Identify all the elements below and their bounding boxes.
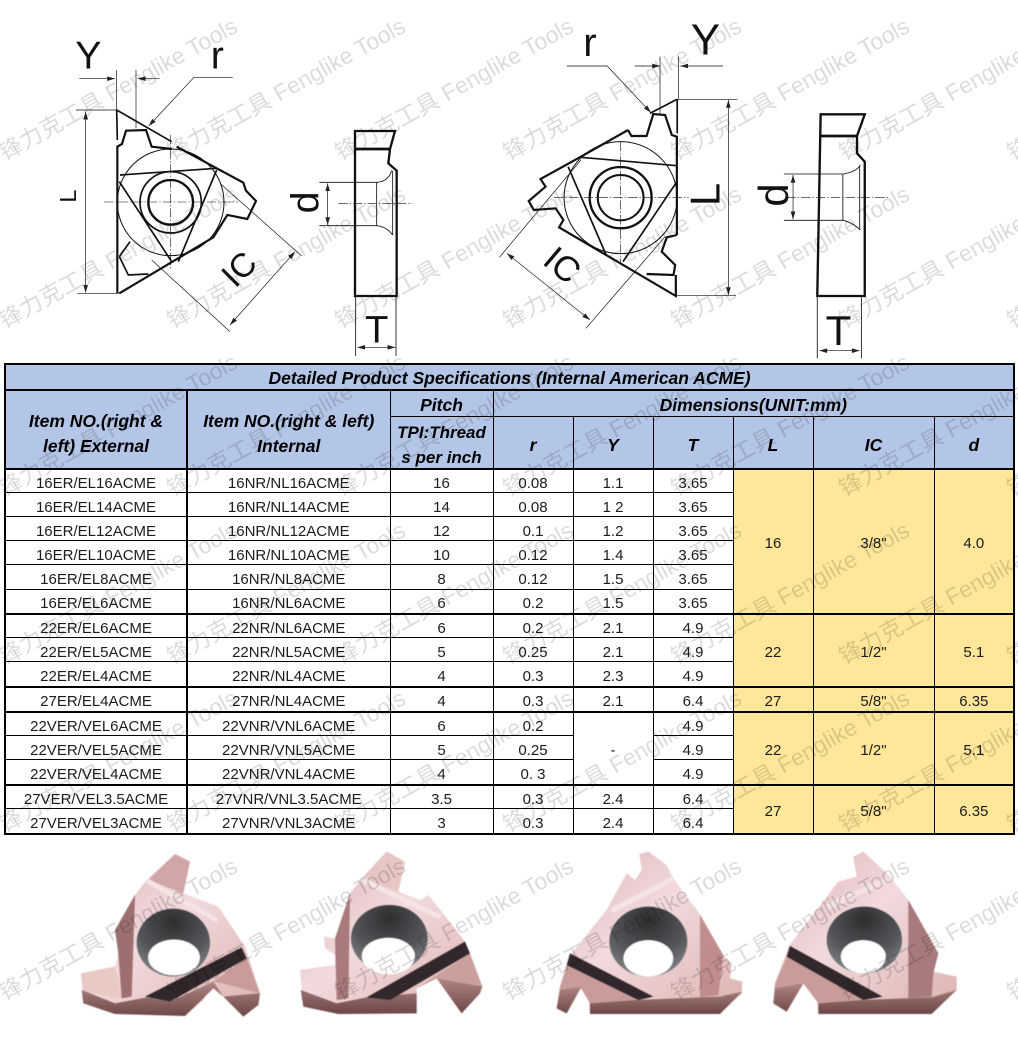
row 27ER/EL4ACME: 0.3 [523, 693, 543, 710]
row 16ER/EL14ACME: 1 2 [603, 498, 623, 516]
row 16ER/EL8ACME [40, 571, 708, 588]
row 22VER/VEL6ACME [30, 713, 1013, 784]
watermark: repeated brand text: 锋力克工具 Fenglike Tools [499, 853, 746, 1005]
row 16ER/EL8ACME: 8 [437, 571, 446, 588]
table title: Detailed Product Specifications (Internal American ACME) [269, 368, 751, 388]
row 22ER/EL6ACME: 22NR/NL6ACME [232, 620, 345, 637]
diagram: internal insert dimension drawing [499, 17, 888, 358]
diagram: external insert dimension drawing: T [365, 309, 388, 352]
row 16ER/EL12ACME: 1.2 [603, 522, 623, 540]
diagram: internal insert dimension drawing: T [826, 307, 851, 354]
diagram: internal insert dimension drawing: d [750, 184, 797, 207]
table title: 1/2" [860, 742, 887, 759]
row 22VER/VEL4ACME: 0. 3 [520, 766, 546, 783]
watermark: repeated brand text: 锋力克工具 Fenglike Tools [499, 181, 746, 333]
row 22VER/VEL5ACME: 4.9 [683, 742, 703, 758]
photo: insert 3 [557, 852, 742, 1014]
row 16ER/EL16ACME: 3.65 [678, 475, 708, 492]
table title: 5/8" [860, 803, 887, 820]
row 27VER/VEL3ACME: 6.4 [683, 815, 703, 832]
header row: column names [391, 417, 1013, 468]
row 22VER/VEL5ACME: 5 [437, 742, 446, 758]
row 16ER/EL12ACME: 12 [433, 522, 450, 540]
row 16ER/EL8ACME: 16ER/EL8ACME [40, 571, 152, 588]
row 27ER/EL4ACME: 5/8" [860, 693, 887, 710]
row 16ER/EL8ACME: 0.12 [518, 571, 548, 588]
row 22ER/EL6ACME: 22ER/EL6ACME [40, 620, 152, 637]
row 16ER/EL8ACME: 16NR/NL8ACME [232, 571, 345, 588]
diagram: internal insert dimension drawing: r [583, 20, 597, 65]
row 27ER/EL4ACME: 27NR/NL4ACME [232, 693, 345, 710]
table title: 27 [765, 803, 781, 820]
photo: insert 4 [773, 852, 957, 1014]
row 22ER/EL4ACME: 2.3 [603, 668, 623, 685]
row 27ER/EL4ACME: 4 [437, 693, 446, 710]
watermark: repeated brand text: 锋力克工具 Fenglike Tools [499, 349, 746, 501]
row 27ER/EL4ACME [40, 688, 1013, 711]
table title: - [610, 742, 616, 759]
watermark: repeated brand text: 锋力克工具 Fenglike Tools [163, 181, 410, 333]
row 16ER/EL14ACME: 0.08 [518, 498, 548, 516]
row 22ER/EL4ACME: 22ER/EL4ACME [40, 668, 152, 685]
row 27VER/VEL3.5ACME: 3.5 [431, 791, 452, 808]
row 22ER/EL4ACME: 22NR/NL4ACME [232, 668, 345, 685]
row 16ER/EL10ACME: 3.65 [678, 546, 708, 564]
header row: column names: Y [607, 435, 619, 455]
watermark: repeated brand text: 锋力克工具 Fenglike Tools [331, 685, 578, 837]
row 16ER/EL6ACME [40, 595, 708, 612]
row 16ER/EL14ACME [36, 498, 708, 516]
table title: Internal [257, 436, 320, 456]
row 22ER/EL4ACME: 4.9 [683, 668, 703, 685]
row 27VER/VEL3.5ACME: 2.4 [603, 791, 623, 808]
row 27VER/VEL3ACME: 2.4 [603, 815, 623, 832]
table title: left) External [43, 436, 149, 456]
row 16ER/EL10ACME: 10 [433, 546, 450, 564]
header row: column names: L [768, 435, 778, 455]
watermark: repeated brand text: 锋力克工具 Fenglike Tools [331, 853, 578, 1005]
row 22VER/VEL4ACME: 4 [437, 766, 446, 783]
row 16ER/EL16ACME [36, 470, 1013, 613]
watermark: repeated brand text: 锋力克工具 Fenglike Tools [667, 181, 914, 333]
row 22VER/VEL6ACME: 4.9 [683, 718, 703, 735]
table title: Item NO.(right & left) [203, 411, 374, 431]
header row: column names: IC [865, 435, 882, 455]
row 27ER/EL4ACME: 6.4 [683, 693, 703, 710]
table title: 3/8" [860, 535, 887, 552]
row 27ER/EL4ACME: 27ER/EL4ACME [40, 693, 152, 710]
row 27VER/VEL3.5ACME [24, 786, 1013, 833]
row 22ER/EL6ACME [40, 615, 1013, 686]
row 27VER/VEL3.5ACME: 6.4 [683, 791, 703, 808]
row 16ER/EL16ACME: 1.1 [603, 475, 623, 492]
watermark: repeated brand text: 锋力克工具 Fenglike Tools [163, 685, 410, 837]
row 16ER/EL14ACME: 16ER/EL14ACME [36, 498, 156, 516]
row 22ER/EL5ACME: 22NR/NL5ACME [232, 644, 345, 660]
row 22VER/VEL5ACME: 22VNR/VNL5ACME [222, 742, 355, 758]
row 16ER/EL10ACME: 16ER/EL10ACME [36, 546, 156, 564]
header row: item, pitch, dimensions: Dimensions(UNIT:mm) [660, 395, 847, 415]
watermark: repeated brand text: 锋力克工具 Fenglike Tools [499, 517, 746, 669]
table title [6, 365, 1013, 833]
row 22VER/VEL6ACME: 22VER/VEL6ACME [30, 718, 162, 735]
table title: 16 [765, 535, 781, 552]
watermark: repeated brand text: 锋力克工具 Fenglike Tools [163, 349, 410, 501]
row 22VER/VEL4ACME: 22VER/VEL4ACME [30, 766, 162, 783]
row 16ER/EL6ACME: 6 [437, 595, 446, 612]
diagram: internal insert dimension drawing: L [681, 183, 729, 206]
diagram: external insert dimension drawing: r [211, 33, 224, 77]
row 27ER/EL4ACME: 6.35 [959, 693, 988, 710]
row 27VER/VEL3ACME: 27VER/VEL3ACME [30, 815, 162, 832]
row 22ER/EL5ACME: 0.25 [518, 644, 548, 660]
row 16ER/EL10ACME: 1.4 [603, 546, 623, 564]
diagram: external insert dimension drawing: Y [75, 33, 101, 77]
row 22ER/EL6ACME: 0.2 [523, 620, 543, 637]
row 16ER/EL16ACME: 0.08 [518, 475, 548, 492]
diagram: external insert dimension drawing: d [283, 191, 327, 213]
photo: insert 1 [81, 854, 260, 1017]
row 22VER/VEL5ACME [30, 742, 703, 758]
watermark: repeated brand text: 锋力克工具 Fenglike Tools [331, 517, 578, 669]
row 22ER/EL4ACME: 4 [437, 668, 446, 685]
row 22ER/EL6ACME: 6 [437, 620, 446, 637]
diagram: internal insert dimension drawing: Y [691, 17, 720, 64]
watermark: repeated brand text: 锋力克工具 Fenglike Tools [331, 13, 578, 165]
row 16ER/EL14ACME: 14 [433, 498, 450, 516]
row 16ER/EL16ACME: 16ER/EL16ACME [36, 475, 156, 492]
row 22ER/EL6ACME: 2.1 [603, 620, 623, 637]
diagram: internal insert dimension drawing: IC [536, 239, 588, 292]
row 27VER/VEL3.5ACME: 27VNR/VNL3.5ACME [216, 791, 362, 808]
diagram: external insert dimension drawing [55, 33, 412, 356]
header row: column names: d [968, 435, 979, 455]
watermark: repeated brand text: 锋力克工具 Fenglike Tools [163, 13, 410, 165]
header row: column names: T [688, 435, 698, 455]
row 27VER/VEL3.5ACME: 27VER/VEL3.5ACME [24, 791, 168, 808]
row 16ER/EL12ACME: 3.65 [678, 522, 708, 540]
header row: column names: s per inch [401, 448, 482, 467]
header row: column names: r [530, 435, 536, 455]
row 27VER/VEL3ACME: 3 [437, 815, 446, 832]
row 27VER/VEL3ACME: 27VNR/VNL3ACME [222, 815, 355, 832]
row 16ER/EL16ACME: 16NR/NL16ACME [228, 475, 350, 492]
watermark: repeated brand text: 锋力克工具 Fenglike Tools [667, 349, 914, 501]
row 22ER/EL5ACME: 22ER/EL5ACME [40, 644, 152, 660]
row 27ER/EL4ACME: 27 [765, 693, 781, 710]
row 22VER/VEL5ACME: 0.25 [518, 742, 548, 758]
watermark: repeated brand text: 锋力克工具 Fenglike Tools [667, 685, 914, 837]
table title: 5.1 [963, 644, 984, 661]
row 16ER/EL6ACME: 3.65 [678, 595, 708, 612]
watermark: repeated brand text: 锋力克工具 Fenglike Tools [0, 13, 242, 165]
row 16ER/EL10ACME: 0.12 [518, 546, 548, 564]
diagram: external insert dimension drawing: IC [215, 245, 265, 295]
row 16ER/EL12ACME: 0.1 [523, 522, 543, 540]
row 27VER/VEL3ACME [30, 815, 704, 832]
watermark: repeated brand text: 锋力克工具 Fenglike Tools [0, 181, 242, 333]
row 16ER/EL6ACME: 16ER/EL6ACME [40, 595, 152, 612]
row 22VER/VEL4ACME: 22VNR/VNL4ACME [222, 766, 355, 783]
watermark: repeated brand text: 锋力克工具 Fenglike Tools [0, 517, 242, 669]
row 16ER/EL6ACME: 1.5 [603, 595, 623, 612]
watermark: repeated brand text: 锋力克工具 Fenglike Tools [667, 13, 914, 165]
watermark: repeated brand text: 锋力克工具 Fenglike Tools [0, 685, 242, 837]
watermark: repeated brand text: 锋力克工具 Fenglike Tools [0, 853, 242, 1005]
row 16ER/EL12ACME: 16ER/EL12ACME [36, 522, 156, 540]
row 22ER/EL6ACME: 4.9 [683, 620, 703, 637]
row 16ER/EL14ACME: 3.65 [678, 498, 708, 516]
product photos: four coated inserts [80, 851, 958, 1018]
diagram: external insert dimension drawing: L [55, 190, 81, 203]
watermark: repeated brand text: 锋力克工具 Fenglike Tools [163, 853, 410, 1005]
row 22ER/EL4ACME [40, 668, 703, 685]
row 22VER/VEL4ACME: 4.9 [683, 766, 703, 783]
watermark: repeated brand text: 锋力克工具 Fenglike Tools [0, 349, 242, 501]
header row: item, pitch, dimensions [6, 391, 1013, 468]
row 16ER/EL14ACME: 16NR/NL14ACME [228, 498, 350, 516]
row 22ER/EL5ACME [40, 644, 703, 660]
row 16ER/EL6ACME: 16NR/NL6ACME [232, 595, 345, 612]
specifications table [4, 363, 1015, 834]
table title: 1/2" [860, 644, 887, 661]
row 22ER/EL5ACME: 4.9 [683, 644, 703, 660]
row 22VER/VEL6ACME: 6 [437, 718, 446, 735]
header row: column names: TPI:Thread [397, 423, 486, 442]
photo: insert 2 [300, 852, 482, 1014]
row 16ER/EL16ACME: 16 [433, 475, 450, 492]
watermark: repeated brand text: 锋力克工具 Fenglike Tools [499, 13, 746, 165]
row 22ER/EL4ACME: 0.3 [523, 668, 543, 685]
row 27VER/VEL3.5ACME: 0.3 [523, 791, 543, 808]
watermark: repeated brand text: 锋力克工具 Fenglike Tools [667, 853, 914, 1005]
row 16ER/EL8ACME: 3.65 [678, 571, 708, 588]
table title: 6.35 [959, 803, 988, 820]
row 22VER/VEL5ACME: 22VER/VEL5ACME [30, 742, 162, 758]
table title: Item NO.(right & [29, 411, 163, 431]
row 22VER/VEL6ACME: 0.2 [523, 718, 543, 735]
row 27ER/EL4ACME: 2.1 [603, 693, 623, 710]
watermark: repeated brand text: 锋力克工具 Fenglike Tools [331, 181, 578, 333]
row 27VER/VEL3ACME: 0.3 [523, 815, 543, 832]
table title: 22 [765, 644, 781, 661]
row 16ER/EL10ACME [36, 546, 708, 564]
watermark: repeated brand text: 锋力克工具 Fenglike Tools [331, 349, 578, 501]
table title: 22 [765, 742, 781, 759]
row 16ER/EL6ACME: 0.2 [523, 595, 543, 612]
row 22ER/EL5ACME: 5 [437, 644, 446, 660]
header row: item, pitch, dimensions: Pitch [420, 395, 463, 415]
row 16ER/EL12ACME: 16NR/NL12ACME [228, 522, 350, 540]
row 16ER/EL10ACME: 16NR/NL10ACME [228, 546, 350, 564]
row 16ER/EL8ACME: 1.5 [603, 571, 623, 588]
row 22ER/EL5ACME: 2.1 [603, 644, 623, 660]
row 22VER/VEL6ACME: 22VNR/VNL6ACME [222, 718, 355, 735]
watermark: repeated brand text: 锋力克工具 Fenglike Tools [163, 517, 410, 669]
row 22VER/VEL4ACME [30, 766, 703, 783]
table title: 5.1 [963, 742, 984, 759]
watermark: repeated brand text: 锋力克工具 Fenglike Tools [499, 685, 746, 837]
watermark: repeated brand text: 锋力克工具 Fenglike Tools [667, 517, 914, 669]
table title: 4.0 [963, 535, 984, 552]
row 16ER/EL12ACME [36, 522, 708, 540]
